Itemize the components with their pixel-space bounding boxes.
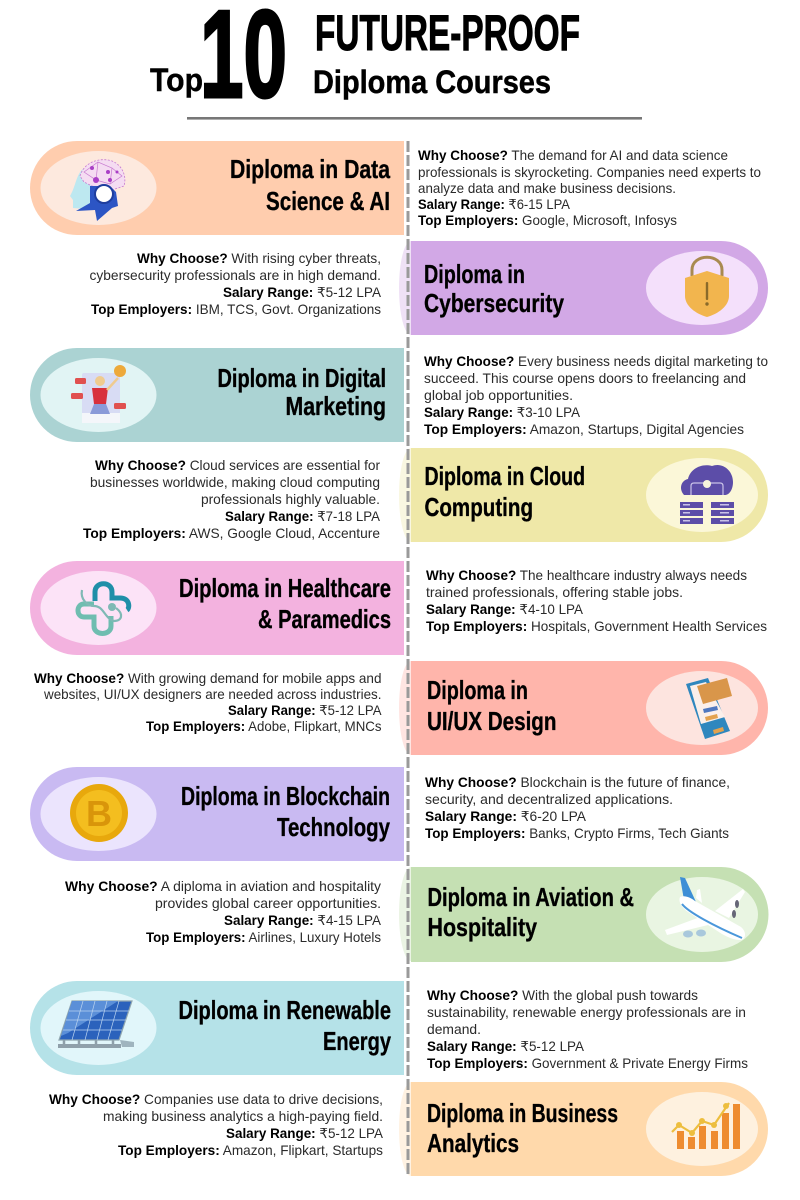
text block: Digital Marketing: Top Employers: Amazon, Startups, Digital Agencies <box>424 422 744 437</box>
text block: Cloud Computing: Top Employers: AWS, Google Cloud, Accenture <box>83 526 380 541</box>
heading: Science & AI <box>266 186 390 216</box>
heading <box>424 461 585 522</box>
text block: Blockchain Technology: Salary Range: ₹6-20 LPA <box>425 809 587 824</box>
heading <box>427 675 556 736</box>
text block: Healthcare and Paramedics: Salary Range: ₹4-10 LPA <box>426 602 584 617</box>
title: Top <box>150 62 203 98</box>
heading <box>428 882 634 942</box>
text block: Cloud Computing <box>83 458 381 541</box>
text block: Renewable Energy: Salary Range: ₹5-12 LPA <box>427 1039 585 1054</box>
title <box>150 0 580 124</box>
heading: Cybersecurity <box>424 288 564 318</box>
text block: Renewable Energy: Why Choose? With the global push towards <box>427 988 698 1003</box>
text block: Renewable Energy: demand. <box>427 1022 481 1037</box>
text block: Aviation and Hospitality <box>65 879 382 945</box>
heading: Diploma in <box>427 675 528 705</box>
text block: Blockchain Technology: Top Employers: Banks, Crypto Firms, Tech Giants <box>425 826 729 841</box>
heading <box>218 363 386 421</box>
text block: Digital Marketing: Salary Range: ₹3-10 LPA <box>424 405 581 420</box>
text block: Renewable Energy: sustainability, renewable energy professionals are in <box>427 1005 746 1020</box>
text block: Business Analytics: Why Choose? Companies use data to drive decisions, <box>49 1092 383 1107</box>
text block: Healthcare and Paramedics <box>426 568 767 634</box>
panel: Healthcare and Paramedics <box>30 561 404 655</box>
heading: Diploma in <box>424 259 525 289</box>
text block: Cybersecurity: Salary Range: ₹5-12 LPA <box>223 285 382 300</box>
heading: Diploma in Aviation & <box>428 882 634 912</box>
heading: & Paramedics <box>258 604 391 634</box>
heading <box>230 154 390 216</box>
text block: UI/UX Design: Top Employers: Adobe, Flipkart, MNCs <box>146 719 382 734</box>
text block: Cybersecurity: Why Choose? With rising cyber threats, <box>137 251 381 266</box>
title: FUTURE-PROOF <box>315 5 580 61</box>
icon: analytics bar chart <box>672 1103 740 1149</box>
icon: phone with payment card <box>686 678 732 739</box>
heading: Diploma in Healthcare <box>179 573 391 603</box>
text block: UI/UX Design: Why Choose? With growing demand for mobile apps and <box>34 671 382 686</box>
text block: Cloud Computing: Why Choose? Cloud services are essential for <box>95 458 380 473</box>
heading: Analytics <box>427 1128 519 1158</box>
text block: Cybersecurity <box>90 251 382 317</box>
panel: Cybersecurity <box>411 241 768 335</box>
heading <box>424 259 564 318</box>
text block: Data Science and AI: professionals is skyrocketing. Companies need experts to <box>418 165 761 180</box>
heading: Technology <box>277 812 390 842</box>
text block: Cloud Computing: professionals highly valuable. <box>201 492 380 507</box>
heading: Diploma in Digital <box>218 363 386 393</box>
panel: Cloud Computing <box>411 448 768 542</box>
text block: UI/UX Design <box>34 671 382 734</box>
heading <box>181 781 390 842</box>
text block: Cloud Computing: businesses worldwide, making cloud computing <box>90 475 380 490</box>
text block: Data Science and AI <box>418 148 761 228</box>
panel: Digital Marketing <box>30 348 404 442</box>
heading <box>427 1098 618 1158</box>
heading: Marketing <box>286 391 386 421</box>
text block: Healthcare and Paramedics: Top Employers: Hospitals, Government Health Services <box>426 619 767 634</box>
text block: Digital Marketing: global job opportunities. <box>424 388 573 403</box>
heading: Diploma in Blockchain <box>181 781 390 811</box>
heading: Diploma in Cloud <box>424 461 585 491</box>
text block: Aviation and Hospitality: Salary Range: ₹4-15 LPA <box>224 913 382 928</box>
text block: Blockchain Technology: Why Choose? Blockchain is the future of finance, <box>425 775 730 790</box>
icon: padlock shield <box>685 257 729 317</box>
text block: Business Analytics: making business analytics a high-paying field. <box>103 1109 383 1124</box>
heading: Computing <box>424 492 533 522</box>
panel: Business Analytics <box>411 1082 768 1176</box>
panel: Renewable Energy <box>30 981 404 1075</box>
heading: Diploma in Business <box>427 1098 618 1128</box>
heading <box>179 573 391 634</box>
text block: Cloud Computing: Salary Range: ₹7-18 LPA <box>225 509 381 524</box>
panel: Aviation and Hospitality <box>411 867 768 962</box>
heading <box>178 995 391 1056</box>
text block: Healthcare and Paramedics: Why Choose? The healthcare industry always needs <box>426 568 747 583</box>
icon: bitcoin coin: B <box>86 793 112 834</box>
text block: UI/UX Design: websites, UI/UX designers are needed across industries. <box>43 687 382 702</box>
text block: Aviation and Hospitality: Why Choose? A diploma in aviation and hospitality <box>65 879 381 894</box>
icon: social media influencer <box>71 365 126 423</box>
text block: Business Analytics: Top Employers: Amazon, Flipkart, Startups <box>118 1143 383 1158</box>
text block: Data Science and AI: Top Employers: Google, Microsoft, Infosys <box>418 213 677 228</box>
text block: UI/UX Design: Salary Range: ₹5-12 LPA <box>228 703 382 718</box>
icon: AI brain <box>70 160 125 221</box>
text block: Cybersecurity: Top Employers: IBM, TCS, Govt. Organizations <box>91 302 381 317</box>
text block: Cybersecurity: cybersecurity professionals are in high demand. <box>90 268 381 283</box>
text block: Business Analytics: Salary Range: ₹5-12 LPA <box>226 1126 384 1141</box>
heading: Hospitality <box>428 912 537 942</box>
heading: UI/UX Design <box>427 706 556 736</box>
heading: Diploma in Renewable <box>178 995 391 1025</box>
text block: Digital Marketing: succeed. This course opens doors to freelancing and <box>424 371 746 386</box>
icon: cloud servers <box>680 465 734 524</box>
text block: Aviation and Hospitality: Top Employers: Airlines, Luxury Hotels <box>146 930 381 945</box>
panel: Data Science and AI <box>30 141 404 235</box>
icon: airplane <box>665 877 745 940</box>
text block: Aviation and Hospitality: provides global career opportunities. <box>155 896 381 911</box>
title: Diploma Courses <box>313 64 551 100</box>
text block: Blockchain Technology <box>425 775 730 841</box>
heading: Diploma in Data <box>230 154 390 184</box>
text block: Renewable Energy <box>427 988 748 1071</box>
heading: Energy <box>323 1026 391 1056</box>
icon: bitcoin coin <box>70 784 128 842</box>
text block: Business Analytics <box>49 1092 384 1158</box>
text block: Blockchain Technology: security, and decentralized applications. <box>425 792 673 807</box>
text block: Healthcare and Paramedics: trained professionals, offering stable jobs. <box>426 585 683 600</box>
text block: Data Science and AI: analyze data and make business decisions. <box>418 181 676 196</box>
pale bulges behind right bars <box>399 241 423 1176</box>
text block: Data Science and AI: Salary Range: ₹6-15 LPA <box>418 197 571 212</box>
text block: Digital Marketing: Why Choose? Every business needs digital marketing to <box>424 354 768 369</box>
text block: Digital Marketing <box>424 354 768 437</box>
icon: medical cross stethoscope <box>78 584 129 634</box>
icon: solar panel <box>58 1001 134 1048</box>
panel: UI/UX Design <box>411 661 768 755</box>
panel: Blockchain Technology <box>30 767 404 861</box>
text block: Data Science and AI: Why Choose? The demand for AI and data science <box>418 148 728 163</box>
text block: Renewable Energy: Top Employers: Government & Private Energy Firms <box>427 1056 748 1071</box>
